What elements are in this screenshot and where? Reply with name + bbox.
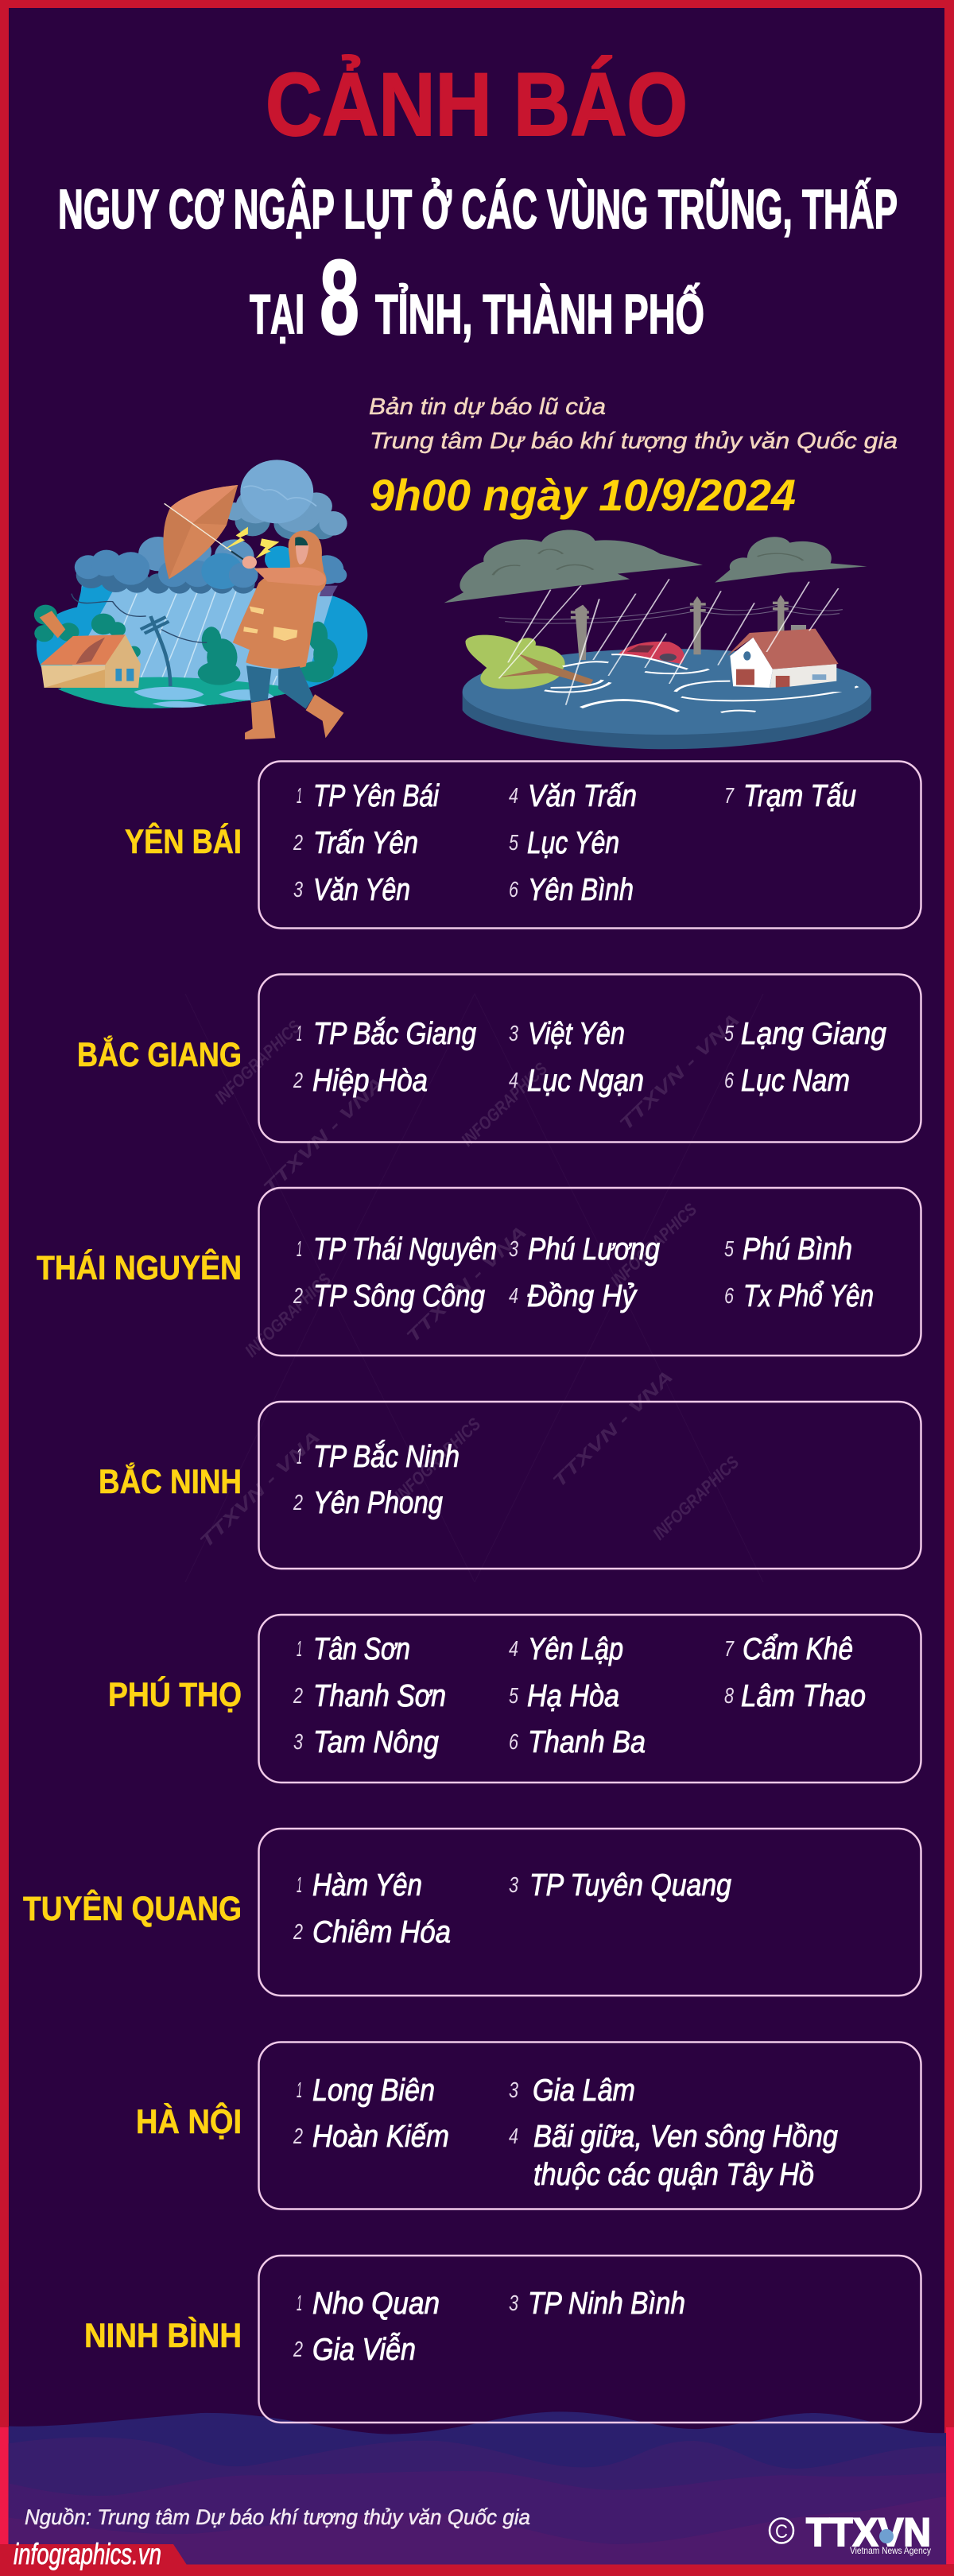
district list: 7 [724,783,735,808]
district box [259,1402,921,1569]
district list: Việt Yên [528,1017,625,1051]
province name: BẮC NINH [99,1462,242,1501]
infographic canvas: TTXVN - VNA [549,1367,677,1492]
district list: 3 [509,2077,518,2102]
top cloud [235,506,338,539]
website tag: infographics.vn [14,2538,161,2570]
district list: TP Sông Công [313,1279,485,1313]
district list: Yên Phong [313,1486,443,1520]
district list [293,779,856,907]
district box [259,1829,921,1996]
district list: 6 [724,1068,734,1092]
district box [259,762,921,929]
district list: 5 [724,1021,734,1046]
district list: 3 [509,1872,518,1897]
district list: 4 [509,1283,518,1308]
district list: 5 [509,1683,518,1708]
illustration: flooded house [444,530,871,749]
district list [293,1868,731,1949]
district list: TP Yên Bái [313,779,440,813]
province name: YÊN BÁI [125,822,242,861]
district list: 5 [509,830,518,855]
bulletin text: Trung tâm Dự báo khí tượng thủy văn Quốc gia [370,429,898,454]
district list: 4 [509,783,518,808]
district list: 2 [293,1283,303,1308]
district list: Lục Ngạn [527,1064,644,1098]
district list: Hạ Hòa [527,1679,619,1713]
district list: 2 [293,2337,303,2361]
province name: PHÚ THỌ [108,1675,242,1714]
heading: warning: CẢNH BÁO [266,55,688,154]
title [58,55,898,357]
district list: 1 [297,1444,302,1468]
district list: Chiêm Hóa [312,1915,451,1949]
district list: TP Thái Nguyên [313,1232,497,1267]
district list: Phú Bình [743,1232,852,1267]
district list [293,1632,866,1759]
district list: Lạng Giang [741,1017,886,1051]
district list: Văn Yên [313,873,410,907]
panel: Phú Thọ [108,1615,921,1783]
district list: 1 [297,783,302,808]
district list: Thanh Ba [528,1725,646,1759]
district list: Bãi giữa, Ven sông Hồng [533,2120,838,2154]
district list: Yên Bình [528,873,634,907]
district list: 6 [724,1283,734,1308]
district list: 1 [297,2291,302,2315]
district list: 3 [293,877,303,902]
district list: 3 [293,1729,303,1754]
district list [293,1440,460,1520]
district box [259,2042,921,2209]
logo: TTXVN: TTXVN [806,2510,931,2555]
district list: 3 [509,1021,518,1046]
district list: Văn Trấn [528,779,637,813]
district list: Cẩm Khê [743,1632,853,1666]
district list: Hoàn Kiếm [312,2120,449,2154]
infographic canvas: TTXVN - VNA [196,1427,324,1552]
panel: Thái Nguyên [37,1188,921,1356]
province name: TUYÊN QUANG [23,1889,242,1928]
illustration: person in storm [34,460,367,739]
district list: thuộc các quận Tây Hồ [533,2158,814,2192]
bulletin time: 9h00 ngày 10/9/2024 [370,470,796,520]
district list: 2 [293,1068,303,1092]
district list: TP Ninh Bình [528,2287,685,2321]
source note: Nguồn: Trung tâm Dự báo khí tượng thủy văn Quốc gia [25,2505,530,2529]
district list: Tân Sơn [313,1632,410,1666]
lower clouds [76,562,255,594]
district list: Phú Lương [528,1232,660,1267]
district list: Hiệp Hòa [312,1064,428,1098]
infographic canvas: TTXVN - VNA [259,1073,387,1198]
district list: 5 [724,1236,734,1261]
district list: 8 [724,1683,734,1708]
heading: line 2: 8 [320,239,359,357]
district list: Tx Phổ Yên [743,1279,874,1313]
district list: 1 [297,1872,302,1897]
district list: 2 [293,2124,303,2148]
district list [293,1232,874,1313]
district list: Trấn Yên [313,826,418,860]
district list: 2 [293,1919,303,1944]
district list [293,2287,685,2367]
district list: 1 [297,2077,302,2102]
infographic canvas: INFOGRAPHICS [211,1016,304,1108]
panel: Yên Bái [125,762,921,929]
district list [293,1017,886,1098]
district list: 1 [297,1236,302,1261]
district list: Đồng Hỷ [527,1279,638,1313]
district list: Trạm Tấu [743,779,856,813]
district list: TP Bắc Ninh [313,1440,460,1474]
province name: THÁI NGUYÊN [37,1248,242,1287]
province name: NINH BÌNH [84,2317,242,2355]
district list: 1 [297,1021,302,1046]
infographic canvas: TTXVN - VNA [402,1222,530,1347]
district list: Tam Nông [313,1725,439,1759]
district list: Hàm Yên [312,1868,422,1903]
panel: Bắc Giang [77,975,921,1142]
district list [293,2074,838,2192]
district list: 4 [509,2124,518,2148]
district list: 1 [297,1636,302,1661]
province name: HÀ NỘI [136,2102,242,2141]
person [233,568,327,669]
district list: 2 [293,1683,303,1708]
infographic canvas: INFOGRAPHICS [457,1058,551,1150]
province name: BẮC GIANG [77,1035,242,1074]
panel: Tuyên Quang [23,1829,921,1996]
district list: TP Tuyên Quang [529,1868,731,1903]
infographic canvas: INFOGRAPHICS [607,1199,700,1291]
district list: 6 [509,1729,518,1754]
district box [259,2256,921,2423]
heading: line 2: TẠI [250,283,304,345]
district list: 4 [509,1636,518,1661]
district list: Thanh Sơn [313,1679,446,1713]
district list: Lâm Thao [741,1679,866,1713]
infographic canvas: TTXVN - VNA [615,1010,743,1135]
district list: 4 [509,1068,518,1092]
district box [259,1615,921,1783]
district list: Gia Viễn [312,2332,416,2367]
district list: Yên Lập [528,1632,623,1666]
bulletin text: Bản tin dự báo lũ của [369,394,606,420]
infographic canvas: INFOGRAPHICS [390,1414,484,1506]
panel: Hà Nội [136,2042,921,2209]
district list: TP Bắc Giang [313,1017,476,1051]
heading: line 2: TỈNH, THÀNH PHỐ [375,282,704,345]
heading: line 2 [250,239,704,357]
district list: 3 [509,1236,518,1261]
district list: 7 [724,1636,735,1661]
district list: 3 [509,2291,518,2315]
district list: 2 [293,830,303,855]
logo: TTXVN: C [775,2521,788,2543]
district list: 2 [293,1490,303,1515]
infographic canvas: INFOGRAPHICS [649,1452,743,1544]
bulletin text [369,394,898,520]
panel: Ninh Bình [84,2256,921,2423]
logo: TTXVN: Vietnam News Agency [850,2545,931,2556]
infographic canvas: INFOGRAPHICS [241,1269,335,1361]
district list: Nho Quan [312,2287,440,2321]
district list: Lục Nam [741,1064,850,1098]
district list: Gia Lâm [533,2074,635,2108]
district box [259,1188,921,1356]
district list: Lục Yên [527,826,619,860]
panel: Bắc Ninh [99,1402,921,1569]
district list: 6 [509,877,518,902]
district list: Long Biên [312,2074,435,2108]
district box [259,975,921,1142]
